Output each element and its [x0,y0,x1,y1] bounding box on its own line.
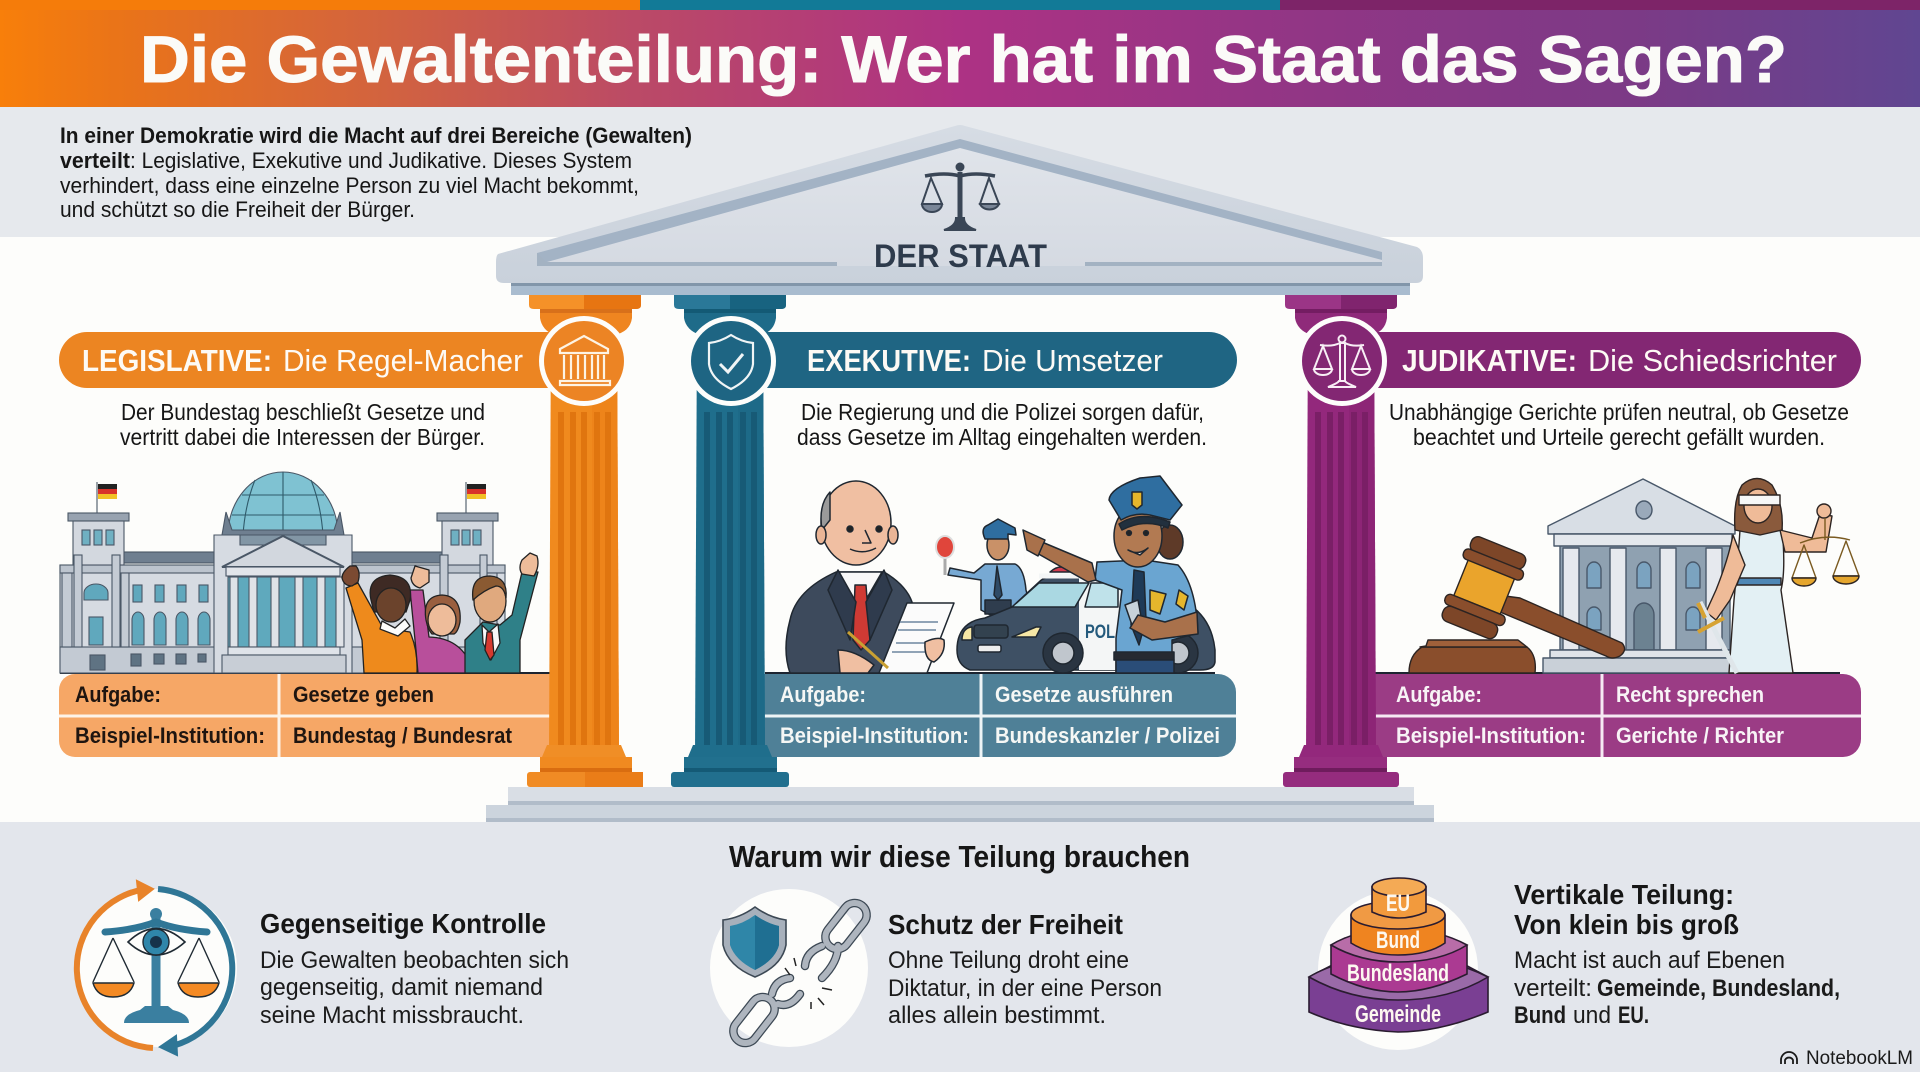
intro text: : Legislative, Exekutive und Judikative. Dieses System [130,148,632,173]
small police officer [936,519,1030,620]
pill: Judikative: Die Schiedsrichter [1588,343,1837,378]
bottom band [0,822,1920,1072]
comparison table: Exekutive: Bundeskanzler / Polizei [995,723,1220,748]
title banner: Die Gewaltenteilung: Wer hat im Staat das Sagen? [140,22,1787,96]
description: Judikative: Unabhängige Gerichte prüfen neutral, ob Gesetze [1389,399,1849,425]
pill: Judikative: JUDIKATIVE: [1402,343,1577,378]
comparison table: Exekutive [755,673,1236,757]
comparison table: Judikative: Beispiel-Institution: [1396,723,1586,748]
police officer [1023,476,1198,673]
intro text: In einer Demokratie wird die Macht auf drei Bereiche (Gewalten) [60,123,692,148]
description: Exekutive: dass Gesetze im Alltag eingehalten werden. [797,424,1207,450]
text: Vertikale Teilung: EU. [1618,1002,1649,1029]
intro band [0,107,1920,237]
icon: level cake: Gemeinde [1355,1001,1441,1028]
police car [957,567,1215,673]
text: Gegenseitige Kontrolle [260,908,569,1029]
icon: purple scales badge [1297,316,1387,406]
intro text: und schützt so die Freiheit der Bürger. [60,197,415,222]
comparison table: Judikative [1368,673,1861,757]
text: Schutz der Freiheit: Ohne Teilung droht eine [888,947,1129,974]
comparison table: Exekutive: Gesetze ausführen [995,682,1173,707]
chancellor [786,481,954,673]
top colour strip [0,0,1920,10]
text: Vertikale Teilung: Gemeinde, Bundesland, [1597,975,1840,1002]
police car: POL [1085,622,1115,643]
comparison table: Legislative: Aufgabe: [75,682,161,707]
text: Schutz der Freiheit: alles allein bestimmt. [888,1002,1106,1029]
text: Schutz der Freiheit [888,909,1162,1029]
pill: Exekutive [755,332,1237,388]
pill: Exekutive: EXEKUTIVE: [807,343,971,378]
icon: mutual control [77,881,237,1055]
icon: level cake [1309,878,1488,1050]
text: Schutz der Freiheit: Diktatur, in der eine Person [888,975,1162,1002]
icon: teal shield badge [686,316,776,406]
comparison table: Judikative: Recht sprechen [1616,682,1764,707]
text: Vertikale Teilung [1514,879,1840,1029]
logo: NotebookLM: NotebookLM [1806,1048,1913,1069]
temple steps [486,787,1434,822]
text: Gegenseitige Kontrolle: seine Macht missbraucht. [260,1002,524,1029]
icon: shield and broken chain [710,889,871,1048]
pill: Judikative [1370,332,1861,388]
description: Legislative: Der Bundestag beschließt Gesetze und [121,399,485,425]
pill: Legislative: LEGISLATIVE: [82,343,272,378]
comparison table: Legislative [59,673,560,757]
description: Judikative: beachtet und Urteile gerecht gefällt wurden. [1413,424,1825,450]
people waving [342,553,538,673]
text: Gegenseitige Kontrolle: Gegenseitige Kontrolle [260,908,546,939]
column: teal [671,295,789,787]
pill: Exekutive: Die Umsetzer [982,343,1163,378]
comparison table: Exekutive: Aufgabe: [780,682,866,707]
heading: why: Warum wir diese Teilung brauchen [729,839,1190,874]
description: Judikative [1389,399,1849,450]
description: Exekutive [797,399,1207,450]
intro text: verteilt [60,148,130,173]
text: Gegenseitige Kontrolle: gegenseitig, damit niemand [260,974,543,1001]
gavel [1409,534,1625,673]
intro text [60,123,692,222]
comparison table: Judikative: Aufgabe: [1396,682,1482,707]
text: Schutz der Freiheit: Schutz der Freiheit [888,909,1123,940]
illustration: chancellor and police [786,476,1215,673]
text: Gegenseitige Kontrolle: Die Gewalten beobachten sich [260,947,569,974]
illustration: Reichstag with citizens [60,472,538,673]
icon: level cake: Bundesland [1347,960,1449,987]
comparison table: Legislative: Beispiel-Institution: [75,723,265,748]
comparison table: Judikative: Gerichte / Richter [1616,723,1784,748]
comparison table: Legislative: Gesetze geben [293,682,434,707]
icon: German flags [98,484,486,499]
icon: scales in pediment [922,164,999,230]
description: Exekutive: Die Regierung und die Polizei sorgen dafür, [801,399,1204,425]
text: Vertikale Teilung: Vertikale Teilung: [1514,879,1734,910]
icon: level cake: Bund [1376,927,1420,954]
description: Legislative [120,399,485,450]
illustration: gavel, court and Justitia [1409,478,1859,673]
text: Vertikale Teilung: Macht ist auch auf Ebenen [1514,947,1785,974]
comparison table: Legislative: Bundestag / Bundesrat [293,723,512,748]
icon: orange temple badge [539,316,629,406]
pill: Legislative [59,332,560,388]
title banner [0,10,1920,107]
comparison table: Exekutive: Beispiel-Institution: [780,723,969,748]
text: Vertikale Teilung: Von klein bis groß [1514,909,1739,940]
text: Vertikale Teilung: Bund [1514,1002,1566,1029]
text: Vertikale Teilung: und [1573,1002,1611,1029]
icon: level cake: EU [1386,890,1410,917]
intro text: verhindert, dass eine einzelne Person zu viel Macht bekommt, [60,173,639,198]
pediment: Der Staat [496,125,1423,295]
column: orange [527,295,643,787]
court building [1543,479,1735,673]
text: Vertikale Teilung: verteilt: [1514,975,1592,1002]
column: purple [1283,295,1399,787]
Justitia [1698,478,1859,673]
pill: Legislative: Die Regel-Macher [283,343,523,378]
description: Legislative: vertritt dabei die Interessen der Bürger. [120,424,485,450]
pediment: Der Staat: DER STAAT [874,238,1047,274]
